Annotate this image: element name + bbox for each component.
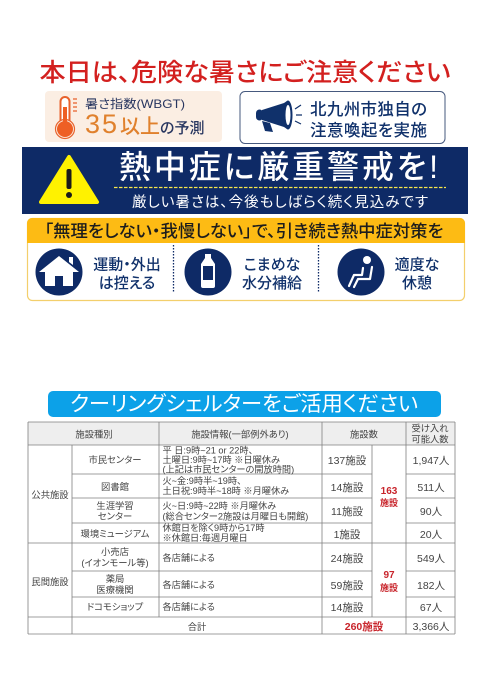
measure: drink water: こまめな: [244, 256, 301, 274]
panel heading: 「無理をしない・我慢しない」で、引き続き熱中症対策を: [44, 222, 444, 241]
row: environment museum: 1施設: [334, 528, 361, 541]
table header text: 受け入れ: [412, 422, 449, 434]
icon: thermometer: [56, 97, 77, 138]
row: lifelong learning centres: 生涯学習: [96, 500, 134, 511]
row: pharmacies: [96, 573, 446, 595]
private subtotal: [380, 570, 398, 593]
row: lifelong learning centres: センター: [98, 512, 132, 522]
row: docomo shops: ドコモショップ: [87, 602, 144, 612]
row: total: 3,366人: [413, 621, 450, 633]
row: pharmacies: 59施設: [331, 579, 364, 592]
row: lifelong learning centres: (総合センター2施設は月曜日も開館): [162, 510, 308, 522]
alert text: 注意喚起を実施: [310, 121, 427, 140]
row: environment museum: 20人: [420, 529, 443, 541]
measure: stay indoors: 運動・外出: [93, 256, 161, 274]
measure: stay indoors: は控える: [99, 275, 155, 292]
row: pharmacies: 医療機関: [96, 584, 134, 595]
row: civic centres: 137施設: [328, 454, 367, 467]
row: environment museum: 休館日を除く9時から17時: [162, 522, 265, 533]
row: retail stores: 小売店: [101, 546, 129, 557]
row: libraries: 14施設: [331, 481, 364, 494]
row: libraries: 図書館: [101, 481, 129, 492]
row: docomo shops: 各店舗による: [162, 601, 215, 612]
row: civic centres: 1,947人: [413, 455, 450, 467]
row: docomo shops: [87, 601, 443, 614]
panel: Kitakyushu alert: [240, 92, 445, 144]
row: civic centres: (上記は市民センターの開放時間): [162, 464, 294, 474]
measure: rest: 休憩: [402, 275, 432, 292]
row: civic centres: 平 日:9時~21 or 22時、: [162, 446, 253, 456]
table header text: [75, 422, 449, 444]
icon: warning triangle: [41, 157, 97, 202]
table grid: [28, 422, 455, 634]
dotted dividers: [174, 245, 318, 293]
row: pharmacies: 182人: [417, 580, 446, 592]
row: lifelong learning centres: 90人: [420, 506, 443, 518]
row: libraries: 土日祝:9時半~18時 ※月曜休み: [162, 485, 289, 496]
table: shelter facilities: [28, 422, 455, 634]
banner subtext: 厳しい暑さは、今後もしばらく続く見込みです: [132, 194, 428, 211]
row: libraries: 511人: [417, 482, 445, 494]
public subtotal: 施設: [380, 497, 398, 508]
icon: water bottle: [184, 248, 232, 296]
row: pharmacies: 薬局: [106, 573, 124, 584]
public subtotal: [380, 486, 398, 508]
row: civic centres: [89, 446, 450, 474]
alert text: 北九州市独自の: [310, 100, 427, 119]
row: retail stores: [81, 546, 446, 568]
table header text: 施設種別: [75, 428, 113, 440]
row: retail stores: 549人: [417, 553, 446, 565]
private subtotal: 97: [383, 570, 395, 581]
table header text: 可能人数: [411, 434, 449, 444]
row: environment museum: ※休館日:毎週月曜日: [162, 532, 248, 543]
measure: rest: 適度な: [395, 256, 440, 274]
table header background: [28, 422, 455, 445]
icon: seated person: [338, 248, 384, 296]
row: environment museum: [81, 522, 443, 543]
WBGT value: 35以上の予測: [85, 109, 205, 139]
icon: megaphone: [256, 100, 302, 132]
row: docomo shops: 67人: [420, 602, 443, 614]
row: libraries: [101, 475, 445, 496]
public subtotal: 163: [381, 486, 398, 497]
measure: drink water: 水分補給: [242, 275, 302, 292]
row: retail stores: 24施設: [331, 552, 364, 565]
row: retail stores: (イオンモール等): [81, 557, 149, 568]
row: lifelong learning centres: 火~日:9時~22時 ※月曜休み: [162, 500, 276, 511]
panel: WBGT forecast: [45, 91, 222, 142]
panel: navy warning banner: [22, 147, 468, 214]
WBGT label: 暑さ指数(WBGT): [85, 96, 185, 111]
title: 本日は、危険な暑さにご注意ください: [40, 59, 450, 87]
row: environment museum: 環境ミュージアム: [81, 528, 149, 539]
row: libraries: 火~金:9時半~19時、: [162, 475, 242, 486]
row: retail stores: 各店舗による: [162, 552, 215, 563]
row: civic centres: 市民センター: [89, 454, 141, 465]
category: public facilities: 公共施設: [31, 489, 69, 500]
private subtotal: 施設: [380, 582, 398, 593]
row: total: 260施設: [345, 620, 384, 633]
banner: cooling shelter: クーリングシェルターをご活用ください: [70, 393, 418, 416]
row: lifelong learning centres: 11施設: [331, 505, 363, 518]
table header text: 施設情報(一部例外あり): [191, 428, 289, 440]
panel: heatstroke measures: [27, 218, 465, 300]
row: total: [188, 620, 450, 633]
row: total: 合計: [188, 621, 207, 632]
row: pharmacies: 各店舗による: [162, 579, 215, 590]
banner heading: 熱中症に厳重警戒を!: [119, 149, 438, 185]
table header text: 施設数: [350, 428, 378, 440]
dashed line: [114, 186, 446, 188]
row: lifelong learning centres: [96, 500, 443, 522]
icon: house: [36, 248, 82, 296]
row: civic centres: 土曜日:9時~17時 ※日曜休み: [162, 454, 280, 465]
row: docomo shops: 14施設: [331, 601, 364, 614]
category: private facilities: 民間施設: [31, 576, 69, 587]
